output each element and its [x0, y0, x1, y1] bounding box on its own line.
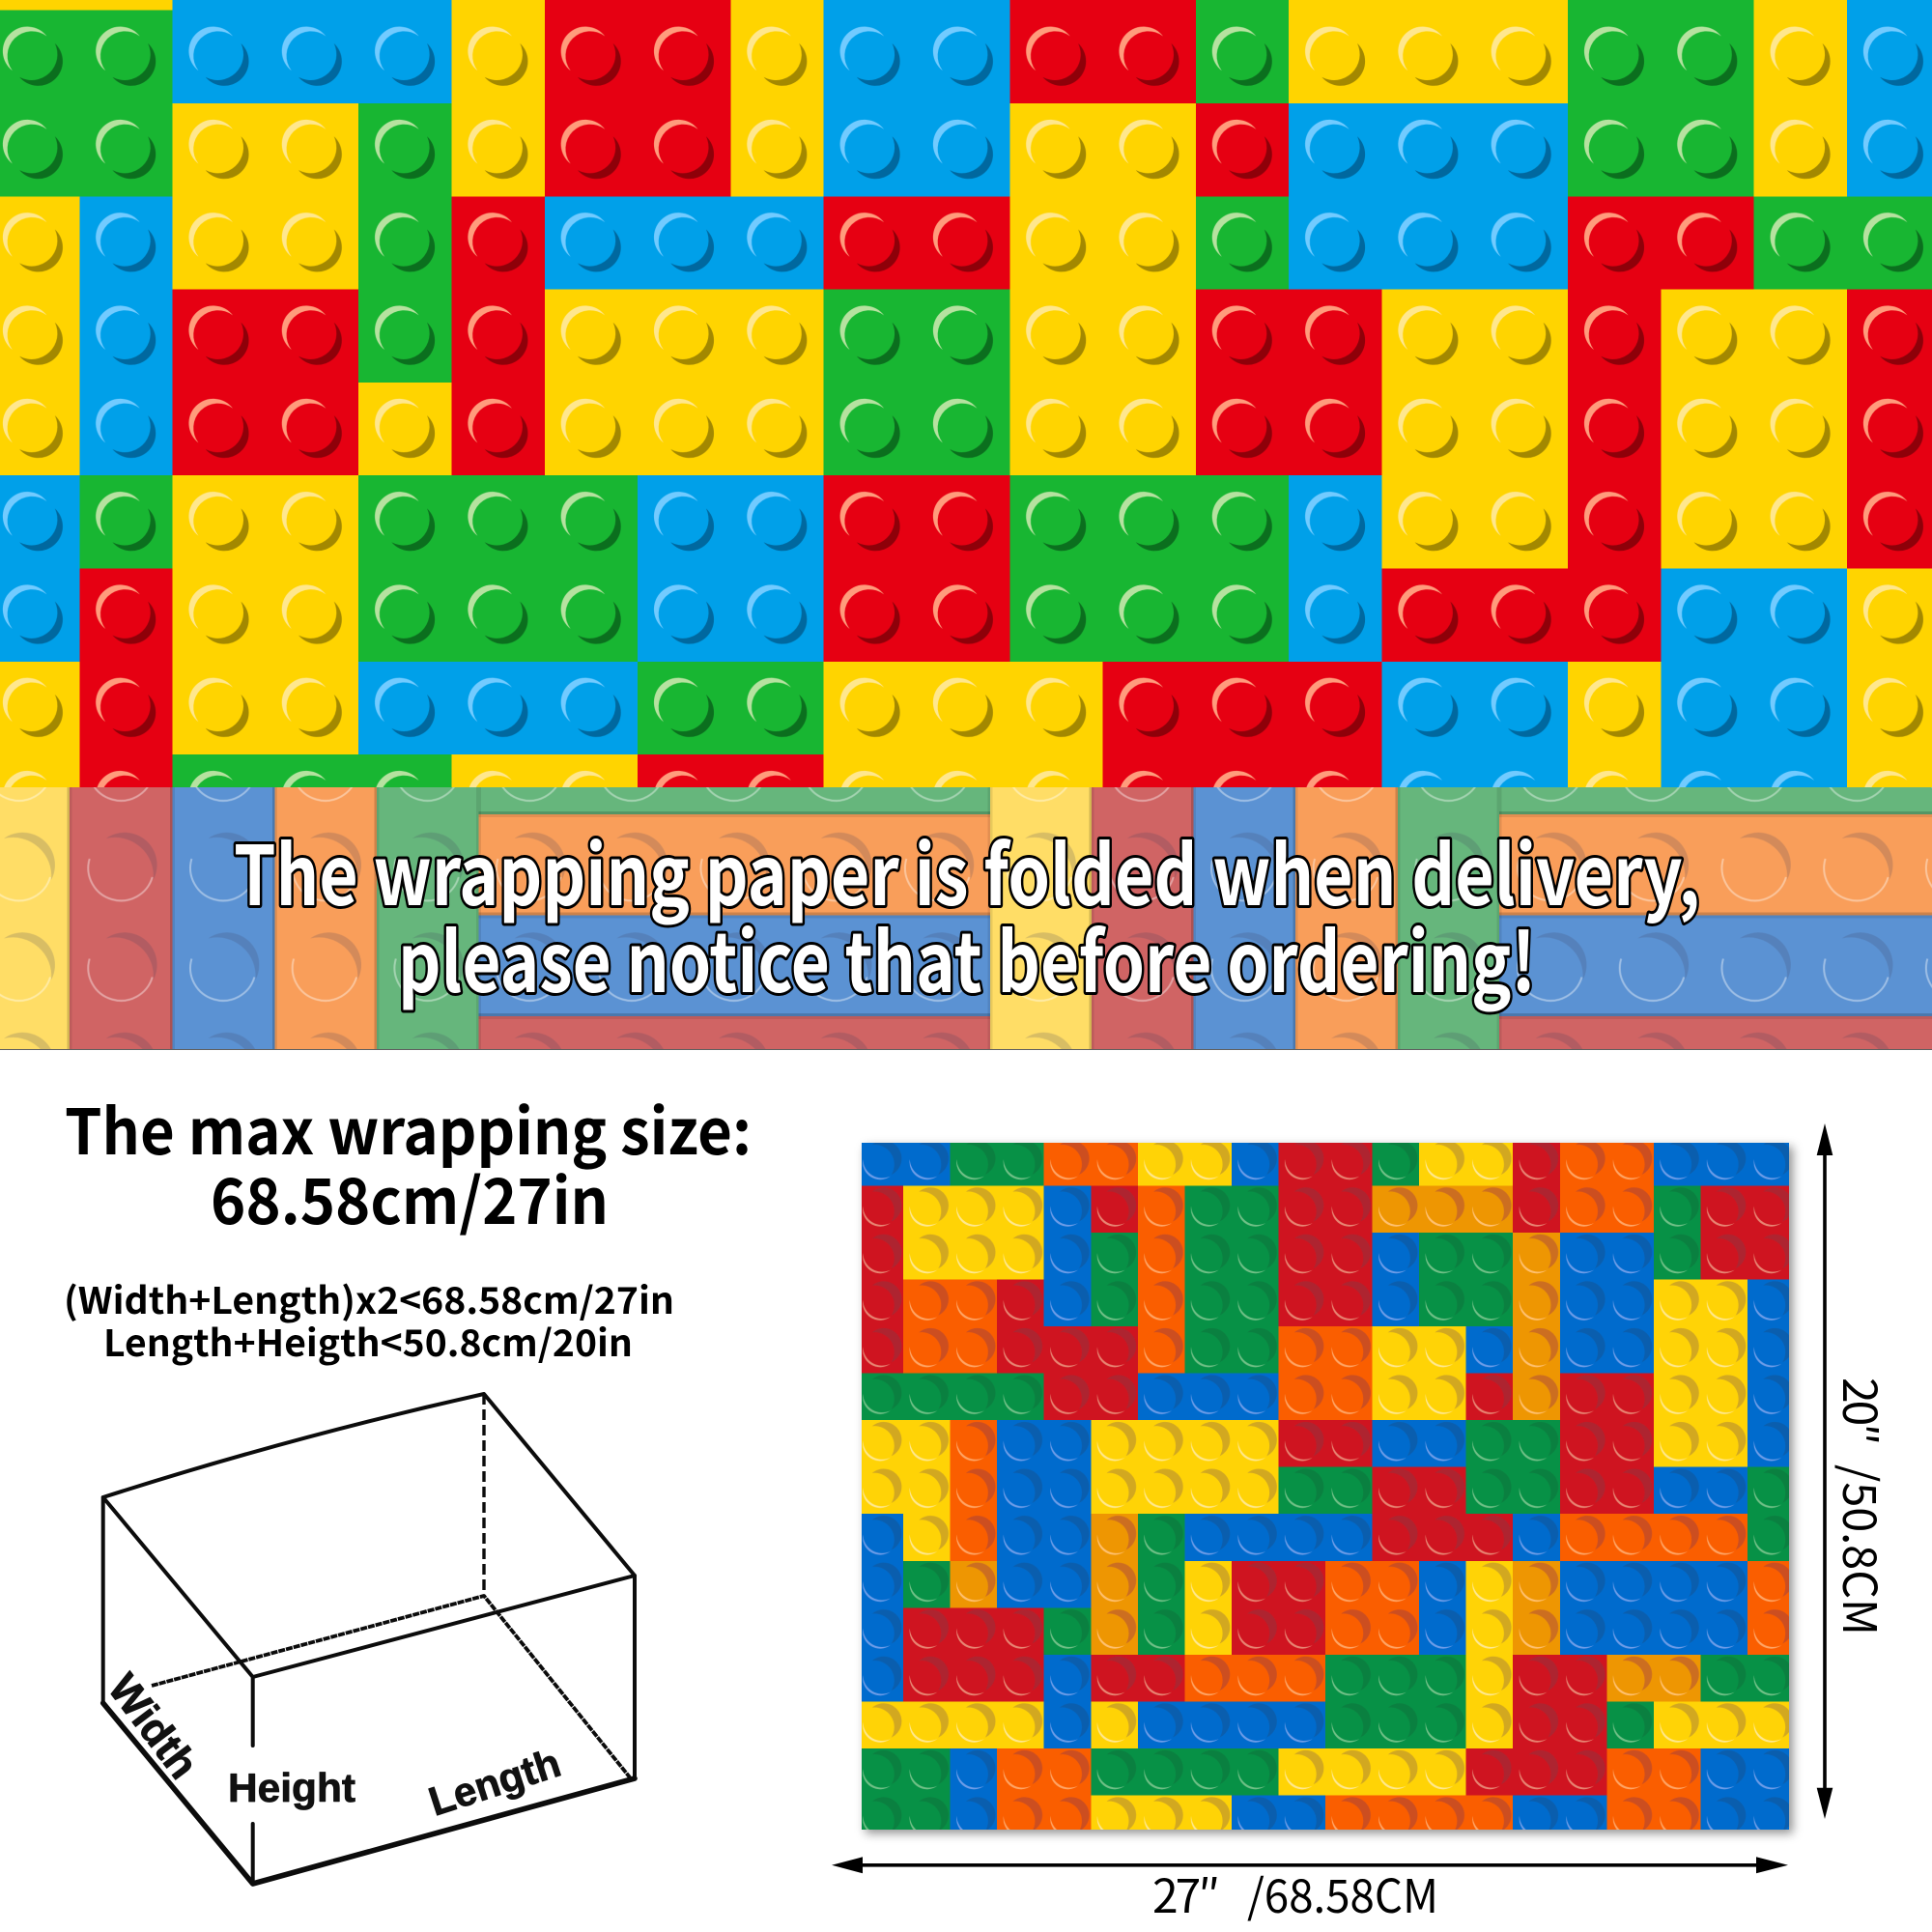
box dimension diagram	[99, 1394, 635, 1884]
box hidden bottom edges	[152, 1596, 630, 1777]
formula line 1: (Width+Length)x2<68.58cm/27in	[64, 1271, 674, 1324]
vertical dimension label: /50.8CM	[1830, 1464, 1897, 1635]
blue bricks	[0, 0, 1932, 847]
mosaic red bricks	[856, 1139, 1795, 1795]
label: height: Height	[228, 1765, 355, 1810]
mosaic green bricks	[856, 1139, 1795, 1842]
panel: top brick pattern	[0, 0, 1932, 787]
panel: size text	[64, 1082, 752, 1367]
red bricks	[79, 0, 1932, 847]
box solid edges	[103, 1394, 635, 1884]
horizontal dimension label: 27″	[1152, 1859, 1220, 1926]
horizontal washed-out bars	[0, 753, 1932, 1084]
mosaic yellow bricks	[856, 1139, 1795, 1842]
label: length: Length	[423, 1740, 566, 1825]
mosaic amber bricks	[951, 1185, 1700, 1701]
banner studs	[0, 787, 1932, 1050]
formula line 2: Length+Heigth<50.8cm/20in	[103, 1314, 633, 1367]
vertical dimension label: 20″	[1830, 1378, 1897, 1445]
vertical washed-out strips, left group	[0, 763, 479, 1072]
heading line 1: The max wrapping size:	[65, 1082, 752, 1173]
mosaic orange bricks	[903, 1139, 1795, 1842]
panel: mosaic wrapping paper sample	[856, 1139, 1795, 1842]
banner text	[234, 810, 1700, 1016]
heading line 2: 68.58cm/27in	[211, 1151, 609, 1242]
banner line 2: please notice that before ordering!	[398, 897, 1536, 1016]
horizontal dimension label	[1152, 1859, 1438, 1926]
vertical washed-out strips, right group	[990, 763, 1499, 1072]
mosaic drop shadow	[866, 1147, 1793, 1833]
box hidden dashed edges	[482, 1394, 486, 1596]
mosaic blue bricks	[856, 1139, 1795, 1842]
vertical dimension arrow	[1817, 1123, 1833, 1819]
box thick bottom edges	[103, 1703, 635, 1884]
green bricks	[0, 0, 1932, 847]
label: width: Width	[99, 1665, 208, 1788]
panel: notice banner	[0, 787, 1932, 1050]
vertical dimension label	[1830, 1378, 1897, 1635]
horizontal dimension label: /68.58CM	[1247, 1859, 1438, 1926]
yellow bricks	[0, 0, 1932, 847]
horizontal dimension arrow	[832, 1857, 1788, 1873]
